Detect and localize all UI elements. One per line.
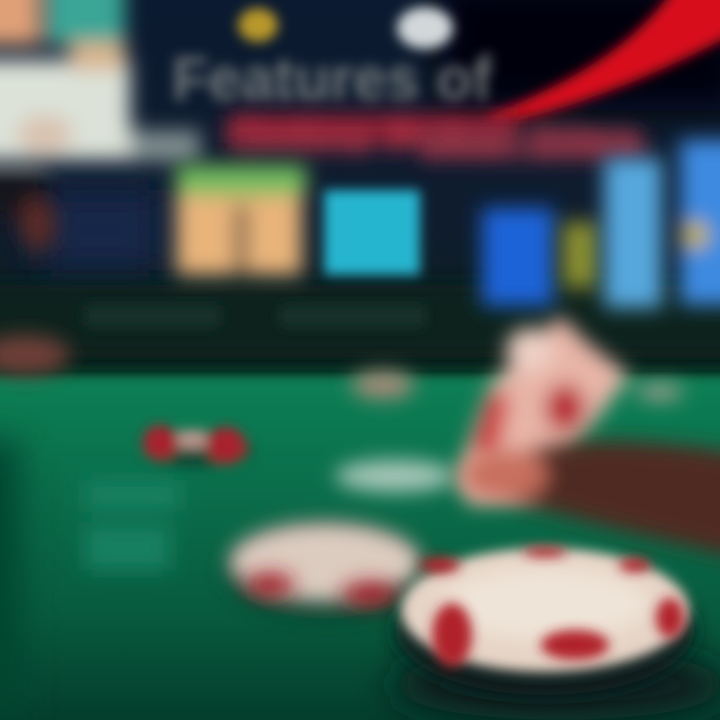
- mid navy band: [40, 190, 160, 270]
- panel: blue screen: [482, 208, 554, 306]
- red swoosh: [485, 0, 720, 125]
- rail edge left: [0, 335, 70, 375]
- table felt base: [0, 392, 720, 720]
- dark upper right: [440, 0, 720, 110]
- poker chip left: [225, 522, 425, 618]
- panel: olive screen: [562, 222, 598, 288]
- panel: green and peach screen: [176, 165, 306, 275]
- poker chip right: [395, 547, 695, 695]
- red subtitle band: Online Poker Sites: [230, 115, 640, 162]
- top left mural: [0, 0, 200, 251]
- icon: yellow light: [238, 8, 278, 42]
- panel: light blue screen: [604, 158, 662, 308]
- rail text: [85, 305, 425, 327]
- cards in hand: [455, 315, 684, 505]
- title: Features of: [172, 45, 492, 114]
- table felt: [0, 374, 720, 720]
- card under hand: [335, 460, 455, 492]
- lower right shadow: [390, 650, 720, 720]
- hand: [463, 441, 720, 560]
- panel: right blue screen: [680, 140, 720, 305]
- icon: white light: [397, 7, 453, 49]
- dark table rail: [0, 285, 720, 357]
- distant chip: [351, 371, 415, 399]
- left felt shadow: [0, 440, 20, 720]
- panel: cyan screen: [324, 190, 420, 275]
- background wall: [0, 0, 720, 370]
- small red chips: [142, 425, 254, 468]
- faint felt text: [85, 480, 180, 570]
